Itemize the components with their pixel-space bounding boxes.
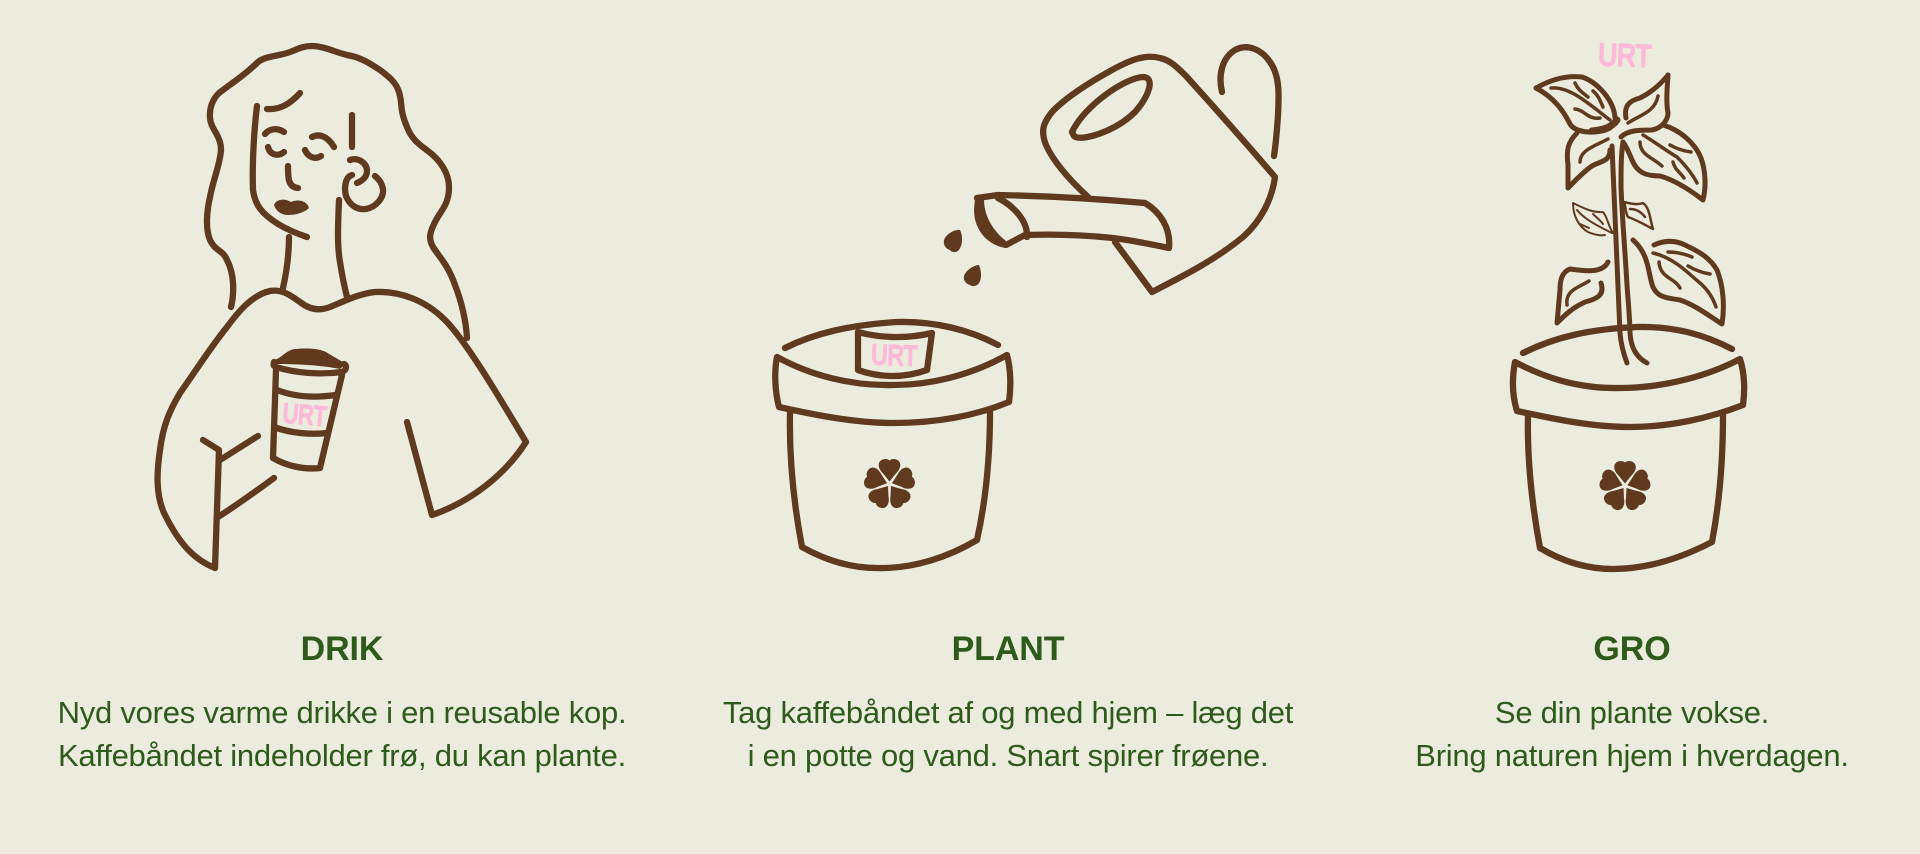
heading: PLANT: PLANT	[952, 630, 1064, 668]
description: DRIK: Nyd vores varme drikke i en reusable kop.	[58, 695, 626, 730]
opening	[1072, 77, 1150, 138]
text block: DRIK	[58, 630, 626, 772]
icon: plant in pot	[1513, 37, 1744, 569]
heading: GRO: GRO	[1593, 630, 1671, 668]
water drops	[944, 230, 981, 286]
description: DRIK	[58, 695, 626, 772]
face	[253, 93, 352, 297]
heading: DRIK: DRIK	[301, 630, 383, 668]
tag	[858, 332, 932, 376]
description: PLANT: i en potte og vand. Snart spirer frøene.	[748, 738, 1268, 772]
description: GRO: Bring naturen hjem i hverdagen.	[1415, 738, 1849, 772]
soil	[1523, 327, 1732, 353]
hand	[203, 436, 274, 568]
hair	[207, 46, 467, 338]
flower logo	[862, 459, 917, 511]
flower logo	[1598, 461, 1652, 513]
label: URT on cup: URT	[281, 398, 328, 432]
label: URT above plant: URT	[1598, 37, 1652, 74]
description: DRIK: Kaffebåndet indeholder frø, du kan plante.	[58, 738, 626, 772]
earring	[345, 159, 383, 209]
icon: pot with tag	[775, 322, 1010, 568]
text block: GRO	[1415, 630, 1849, 772]
description: PLANT: Tag kaffebåndet af og med hjem – læg det	[723, 695, 1293, 730]
icon: woman drinking coffee	[158, 46, 526, 568]
description: GRO: Se din plante vokse.	[1495, 695, 1769, 730]
rim	[1513, 359, 1744, 427]
description: PLANT	[723, 695, 1294, 772]
sweater	[158, 291, 526, 568]
pot body	[790, 412, 990, 568]
text block: PLANT	[723, 630, 1294, 772]
tag: URT	[871, 339, 918, 372]
icon: watering can	[944, 47, 1279, 292]
handle	[1221, 47, 1279, 156]
cup	[273, 348, 346, 468]
spout	[977, 195, 1169, 248]
soil	[785, 322, 998, 348]
stem	[1612, 146, 1627, 363]
rim	[775, 355, 1010, 423]
description: GRO	[1415, 695, 1849, 772]
pot body	[1528, 415, 1723, 569]
leaves	[1536, 75, 1723, 324]
